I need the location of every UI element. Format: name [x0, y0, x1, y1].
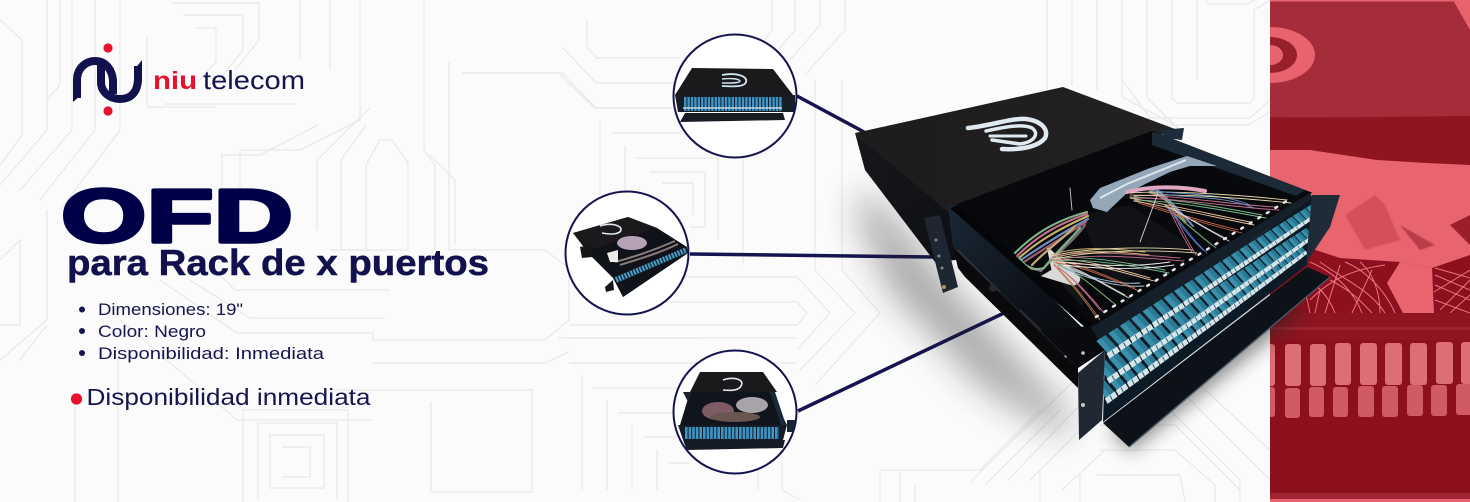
- spec list: [79, 300, 325, 363]
- fibers: [1015, 187, 1291, 320]
- front right bracket: [1306, 195, 1340, 263]
- spec list: Color: Negro: [98, 322, 206, 341]
- subtitle: para Rack de x puertos: [67, 242, 489, 283]
- product shadow: [855, 190, 1300, 452]
- lid: [855, 87, 1183, 214]
- connector line top: [797, 96, 864, 132]
- middle port row: [1097, 228, 1315, 384]
- logo: niu telecom: [73, 43, 305, 116]
- circle: open tray angled: [566, 192, 688, 314]
- body side: [855, 133, 956, 262]
- logo wordmark: telecom: [203, 65, 305, 95]
- bottom port row: [1095, 243, 1307, 404]
- fiber loop bundles: [1015, 187, 1205, 271]
- connector line bottom: [798, 313, 1004, 411]
- front panel: [1090, 193, 1312, 350]
- left rack bracket: [924, 215, 958, 293]
- top port row: [1096, 204, 1320, 358]
- cable spool: [1042, 246, 1083, 307]
- tray flap: [1103, 267, 1330, 447]
- availability note: Disponibilidad inmediata: [86, 384, 371, 410]
- rear right bracket: [1160, 128, 1184, 140]
- rail: [953, 247, 1078, 388]
- lid logo: [968, 119, 1046, 149]
- panel: red product photo: [1270, 0, 1470, 502]
- connector line middle: [690, 254, 932, 257]
- logo wordmark: niu: [153, 67, 197, 95]
- circle: open tray front: [674, 350, 796, 474]
- ports: [1095, 204, 1320, 404]
- main product: fiber drawer: [855, 87, 1340, 447]
- logo wordmark: [153, 65, 305, 95]
- fiber fans: [1052, 190, 1287, 317]
- front left corner: [1040, 326, 1105, 368]
- drawer left wall: [948, 205, 1105, 368]
- spec list: Dimensiones: 19": [98, 300, 243, 319]
- title: OFD: OFD: [61, 174, 293, 258]
- drawer inner: [952, 132, 1310, 328]
- plastic bag: [1090, 156, 1217, 212]
- logo mark: [73, 43, 142, 116]
- circle: closed tray: [674, 34, 796, 158]
- spec list: Disponibilidad: Inmediata: [98, 344, 325, 363]
- front left bracket: [1078, 350, 1105, 440]
